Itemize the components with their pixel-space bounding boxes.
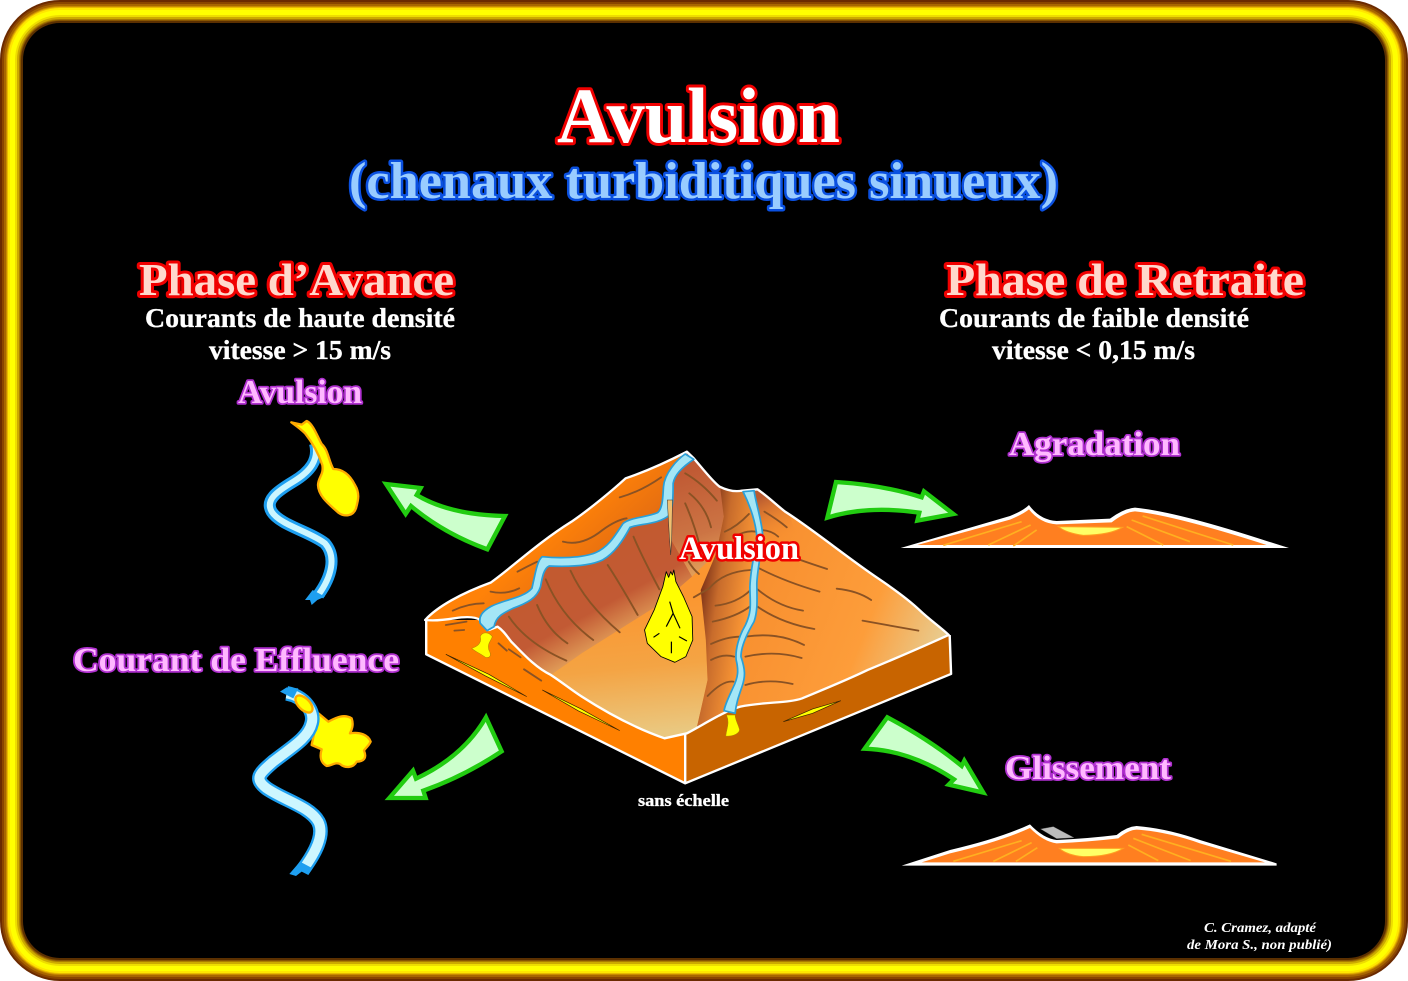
arrow: to glissement bbox=[865, 717, 983, 793]
arrow: to courant de effluence bbox=[389, 717, 502, 798]
left face bbox=[426, 620, 685, 783]
arrow: to avulsion bbox=[386, 484, 505, 549]
label: agradation: Agradation bbox=[1009, 426, 1180, 463]
lens deposits in faces bbox=[446, 654, 841, 731]
label: avulsion: Avulsion bbox=[238, 374, 362, 411]
arrow: to agradation bbox=[827, 482, 953, 521]
arrow: thin avulsion pointer bbox=[667, 500, 672, 555]
icon: yellow lobe bbox=[645, 570, 693, 662]
credit: C. Cramez, adapté bbox=[1204, 921, 1317, 936]
text: courants de faible densité: Courants de faible densité bbox=[939, 303, 1249, 333]
heading: phase d'avance: Phase d’Avance bbox=[139, 254, 454, 305]
text: sans échelle: sans échelle bbox=[638, 791, 729, 810]
channel: right bbox=[724, 491, 763, 713]
title: Avulsion bbox=[557, 72, 840, 159]
block diagram: submarine fan bbox=[420, 440, 960, 783]
credit bbox=[1187, 921, 1332, 953]
icon: effluence channel with yellow splash bbox=[259, 687, 371, 876]
subtitle: (chenaux turbiditiques sinueux) bbox=[349, 153, 1058, 210]
icon: avulsion channel with yellow lobe bbox=[270, 421, 358, 605]
heading: phase de retraite: Phase de Retraite bbox=[946, 254, 1304, 305]
channel: left bbox=[480, 454, 694, 631]
label: glissement: Glissement bbox=[1005, 750, 1172, 787]
contour lines bbox=[446, 473, 918, 696]
cross-section: glissement bbox=[902, 824, 1277, 866]
label: courant de effluence: Courant de Effluence bbox=[73, 642, 399, 679]
icon: yellow deposit left bbox=[472, 633, 492, 657]
text: vitesse > 15 m/s: vitesse > 15 m/s bbox=[209, 335, 391, 365]
cross-section: agradation bbox=[901, 505, 1289, 548]
icon: yellow deposit right bbox=[726, 715, 740, 736]
right face bbox=[685, 635, 951, 783]
block outline bbox=[425, 452, 951, 783]
text: vitesse < 0,15 m/s: vitesse < 0,15 m/s bbox=[992, 335, 1195, 365]
top surface regions bbox=[428, 454, 946, 737]
label: avulsion on block: Avulsion bbox=[679, 531, 799, 567]
text: courants de haute densité: Courants de haute densité bbox=[145, 303, 455, 333]
credit: de Mora S., non publié) bbox=[1187, 938, 1332, 953]
